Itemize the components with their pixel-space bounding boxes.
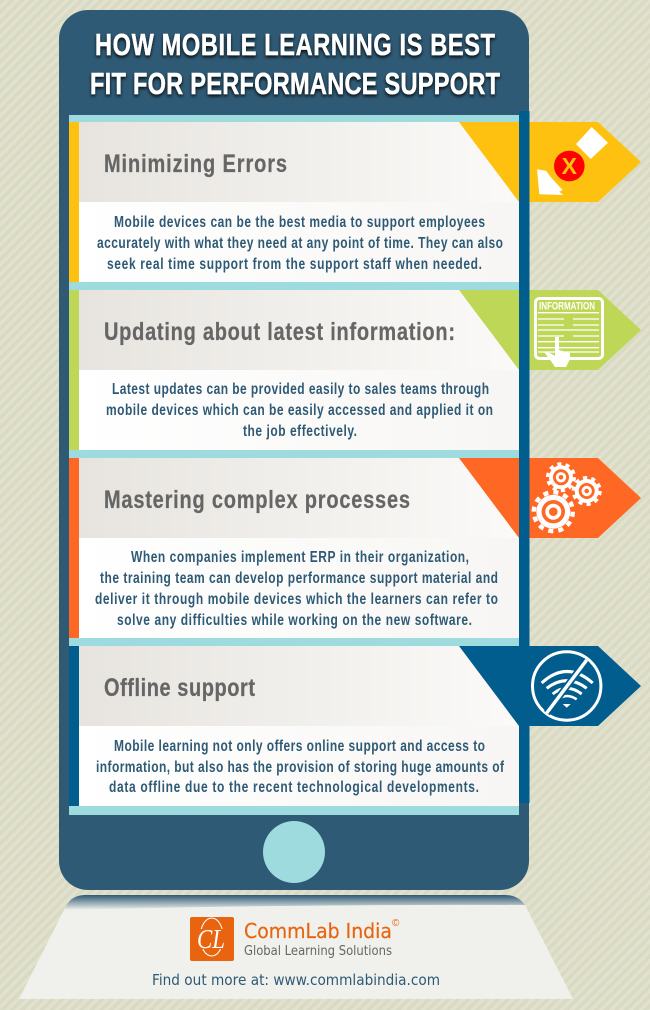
arrow tab: minimizing errors	[459, 122, 641, 202]
icon: information sheet with pointer: INFORMATION	[539, 300, 595, 312]
home button	[263, 821, 325, 883]
icon: gears	[534, 464, 600, 531]
blue right edge bar	[519, 111, 530, 803]
panel: offline support	[69, 638, 519, 815]
logo wordmark: Global Learning Solutions	[244, 944, 392, 959]
icon: error between arrows: X	[562, 153, 578, 179]
logo wordmark: CommLab India	[244, 919, 392, 943]
panel: mastering complex processes	[69, 450, 519, 638]
text block: minimizing errors	[97, 212, 503, 272]
arrow tab: mastering	[459, 458, 641, 538]
arrow tab: offline	[459, 646, 641, 726]
text block: mastering	[95, 547, 498, 628]
text block: updating	[106, 379, 493, 439]
icon: error between arrows	[537, 127, 608, 195]
text block: offline	[96, 736, 504, 795]
text block: mastering: When companies implement ERP in their organization,	[131, 547, 469, 565]
heading: updating: Updating about latest information:	[104, 318, 455, 346]
text block: offline: information, but also has the provision of storing huge amounts of	[96, 757, 504, 775]
heading: mastering: Mastering complex processes	[104, 486, 410, 514]
footer link text: Find out more at: www.commlabindia.com	[152, 971, 440, 989]
arrow tab: updating	[459, 290, 641, 370]
text block: minimizing errors: accurately with what they need at any point of time. They can also	[97, 233, 503, 251]
phone body	[59, 10, 529, 890]
text block: minimizing errors: Mobile devices can be the best media to support employees	[114, 212, 485, 230]
text block: offline: Mobile learning not only offers online support and access to	[114, 736, 485, 754]
footer stand	[19, 895, 573, 999]
logo mark: CL	[197, 924, 225, 954]
text block: updating: mobile devices which can be easily accessed and applied it on	[106, 400, 493, 418]
title	[90, 27, 500, 101]
text block: minimizing errors: seek real time support from the support staff when needed.	[107, 254, 482, 272]
icon: no wifi	[532, 652, 601, 720]
text block: updating: Latest updates can be provided easily to sales teams through	[112, 379, 489, 397]
heading: minimizing errors: Minimizing Errors	[104, 150, 287, 178]
panel: minimizing errors	[69, 115, 519, 282]
logo wordmark: ©	[392, 918, 400, 929]
title: HOW MOBILE LEARNING IS BEST	[95, 27, 495, 62]
logo mark	[190, 917, 234, 961]
panel: updating about latest information	[69, 282, 519, 450]
icon: information sheet with pointer	[536, 298, 602, 367]
text block: updating: the job effectively.	[243, 421, 357, 439]
heading: offline: Offline support	[104, 674, 255, 702]
logo wordmark	[244, 918, 400, 959]
text block: mastering: deliver it through mobile devices which the learners can refer to	[95, 589, 498, 607]
title: FIT FOR PERFORMANCE SUPPORT	[90, 66, 500, 101]
text block: mastering: solve any difficulties while working on the new software.	[117, 610, 472, 628]
text block: mastering: the training team can develop performance support material and	[100, 568, 498, 586]
text block: offline: data offline due to the recent technological developments.	[109, 777, 479, 795]
